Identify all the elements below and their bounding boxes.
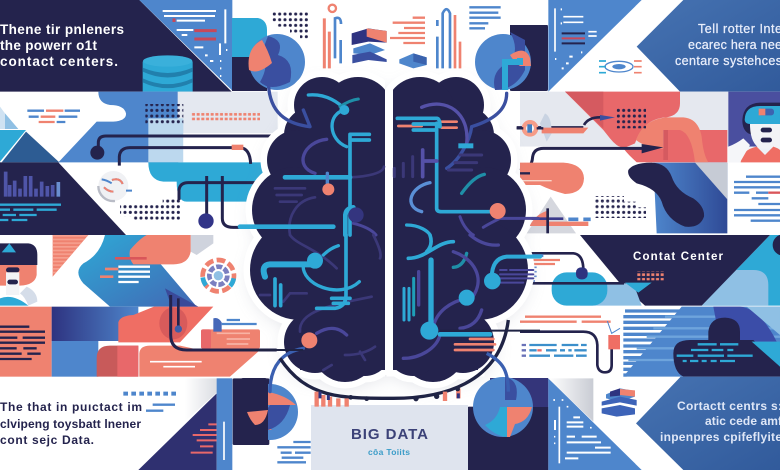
text block: bottom right: inpenpres cpifeflyite: [660, 430, 780, 444]
corner triangles: [0, 107, 59, 162]
brain circuits lower: [260, 235, 540, 392]
icon: bottom left globe: [240, 378, 298, 445]
icon: segmented ring: [203, 260, 234, 291]
icon: layered stack: [602, 388, 637, 417]
salmon block row: [520, 92, 728, 162]
brain right hemisphere: [385, 77, 528, 382]
icon: gauge: [98, 171, 132, 201]
gradient and sofa blocks: [52, 307, 260, 377]
navy hub wire: [240, 320, 540, 407]
panel: white list lines: [734, 177, 780, 221]
corner panels beside top globes: [232, 18, 548, 91]
dot field: [120, 199, 181, 221]
panel: big data label: BIG DATA: [351, 426, 428, 443]
small line list: [27, 111, 80, 122]
icon: eye: [599, 61, 642, 73]
brain: [240, 77, 540, 392]
navy triangle with lines: [138, 393, 217, 470]
bottom right navy panel: [468, 378, 548, 470]
panel: bottom right text background: [636, 377, 780, 470]
connector wires left: [90, 136, 277, 229]
row: striped block: [623, 307, 780, 377]
panel: top left headline: [0, 0, 232, 92]
text block: bottom right: Cortactt centrs s:: [677, 399, 780, 413]
text block: bottom left: cont sejc Data.: [0, 433, 94, 447]
heading: top right text: [675, 22, 780, 68]
blue small stack: [399, 53, 427, 68]
icon: graduation cap: [165, 288, 198, 333]
heading: top left text: the powerr o1t: [0, 38, 98, 53]
navy corner: [510, 25, 548, 91]
icon: top left globe: [249, 34, 305, 90]
gray and blue gradient block: [628, 163, 727, 233]
heading: top left text: [0, 22, 124, 69]
panel: left middle blocks: [0, 92, 278, 235]
salmon lines: [390, 18, 425, 43]
text block: bottom right: [660, 399, 780, 444]
heading: top right text: ecarec hera nee: [688, 38, 780, 52]
decorative lines above body text: [123, 394, 177, 411]
panel: top right headline background: [637, 0, 780, 92]
upper left circuits: [240, 80, 384, 235]
cyan blob and wire: [520, 253, 652, 306]
lower right circuits: [403, 235, 540, 358]
dot grid: [145, 104, 183, 125]
bar icon salmon and blue: [324, 5, 341, 68]
text block: bottom left: [0, 400, 142, 447]
panel: big data label: [311, 405, 468, 470]
panel: big data label: côa Toiits: [368, 447, 410, 457]
icon: connector target: [517, 113, 615, 142]
bottom navy and blue triangle: [468, 378, 642, 470]
white band under row: [520, 147, 728, 233]
shadow fold: [185, 378, 232, 422]
blue strip: [217, 378, 232, 470]
heading: top right text: Tell rotter Inte: [698, 22, 780, 36]
upper right circuits: [394, 93, 538, 235]
salmon blob: [520, 163, 584, 194]
label: contact center: Contat Center: [633, 251, 724, 263]
heading: top left text: Thene tir pnleners: [0, 22, 124, 37]
icon: navy hill with lines: [673, 318, 780, 377]
heading: top right text: centare systehces: [675, 54, 780, 68]
salmon grid: [637, 271, 665, 280]
icon: layered stack center: [352, 28, 387, 63]
panel: top right blocks: [510, 0, 780, 233]
top strip charts: [272, 5, 501, 68]
panel: right lower blocks: [468, 234, 780, 470]
icon: bottom right globe: [473, 377, 533, 437]
dots: [594, 196, 646, 218]
blue triangle with lists: [548, 0, 642, 92]
cyan and light blue blocks: [702, 234, 780, 306]
blue lines right: [469, 7, 501, 28]
connector wire: [171, 295, 277, 350]
navy panel: [580, 235, 770, 306]
brain drop shadow: [250, 83, 528, 388]
brain white outline: [250, 77, 528, 382]
lines and wire: [520, 317, 620, 372]
icon: head with headset: [0, 243, 37, 306]
arrow: [520, 144, 663, 169]
panel: left lower blocks: [0, 235, 277, 470]
text block: bottom left: The that in puıctact im: [0, 400, 142, 414]
wires over brain: [240, 320, 540, 462]
brain circuits upper: [240, 80, 538, 235]
icon: top right globe: [475, 32, 531, 90]
salmon document: [201, 318, 260, 349]
text block: bottom right: atic cede amf: [705, 414, 780, 428]
panel: salmon text lines: [0, 307, 52, 377]
icon: database cylinder: [143, 55, 193, 92]
icon: cross connector: [520, 197, 591, 233]
blue blob with list: [78, 235, 213, 307]
small lower lists: [277, 442, 311, 462]
panel: navy triangle bar chart: [0, 162, 126, 235]
text block: bottom left: clvipeng toysbatt lnener: [0, 417, 141, 431]
striped salmon triangle: [53, 235, 88, 277]
heading: top left text: contact centers.: [0, 54, 118, 69]
lower left circuits: [260, 235, 381, 392]
brain left hemisphere: [250, 77, 393, 382]
blue triangle with list lines: [139, 0, 232, 91]
blue and salmon bars: [437, 9, 460, 68]
dot grid: [272, 11, 310, 38]
purple panel with robot head: [728, 92, 780, 162]
